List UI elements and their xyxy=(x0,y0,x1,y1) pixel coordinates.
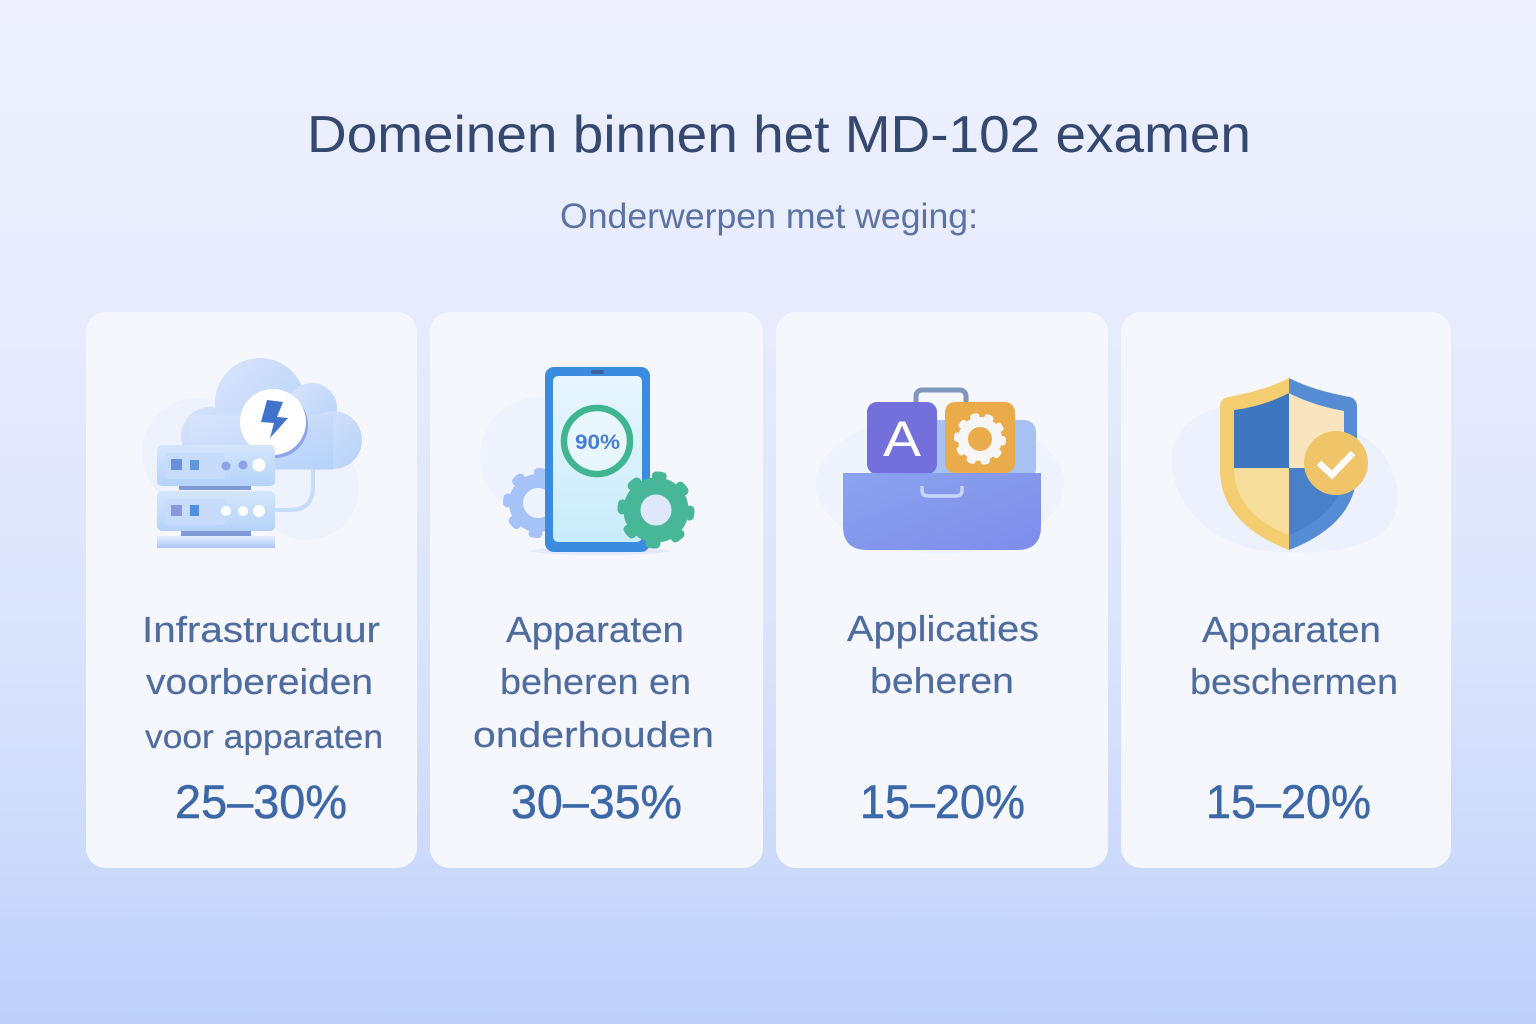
label: apparaten beheren en onderhouden xyxy=(473,609,714,755)
label: applicaties beheren: beheren xyxy=(870,660,1014,701)
icon: shield with check xyxy=(1172,378,1398,553)
label: infrastructuur voorbereiden voor apparaten: voorbereiden xyxy=(146,661,373,702)
gauge value: 90% xyxy=(575,431,620,454)
subtitle: Onderwerpen met weging: xyxy=(560,197,978,236)
panel: infrastructuur voorbereiden xyxy=(86,312,417,868)
percentage: 15–20%: 15–20% xyxy=(1206,775,1371,828)
label: apparaten beschermen: beschermen xyxy=(1190,661,1398,702)
panel: apparaten beschermen xyxy=(1121,312,1451,868)
icon: cloud and servers xyxy=(142,358,362,548)
label: applicaties beheren xyxy=(847,608,1039,701)
label: apparaten beheren en onderhouden: beheren en xyxy=(500,661,691,702)
label: infrastructuur voorbereiden voor apparaten xyxy=(142,609,383,755)
label: apparaten beschermen xyxy=(1190,609,1398,702)
label: apparaten beheren en onderhouden: Apparaten xyxy=(506,609,684,650)
icon: phone with gears xyxy=(480,367,690,555)
percentage: 15–20%: 15–20% xyxy=(860,775,1025,828)
panel: applicaties beheren xyxy=(776,312,1108,868)
label: applicaties beheren: Applicaties xyxy=(847,608,1039,649)
label: infrastructuur voorbereiden voor apparaten: voor apparaten xyxy=(145,718,383,755)
title: Domeinen binnen het MD-102 examen xyxy=(307,106,1251,164)
percentage: 30–35%: 30–35% xyxy=(511,775,682,828)
panel: apparaten beheren en onderhouden xyxy=(430,312,763,868)
label: apparaten beheren en onderhouden: onderhouden xyxy=(473,714,714,755)
label: apparaten beschermen: Apparaten xyxy=(1202,609,1381,650)
app letter: A xyxy=(883,411,922,467)
label: infrastructuur voorbereiden voor apparaten: Infrastructuur xyxy=(142,609,380,650)
percentage: 25–30%: 25–30% xyxy=(175,775,347,828)
icon: toolbox with apps xyxy=(816,390,1064,554)
